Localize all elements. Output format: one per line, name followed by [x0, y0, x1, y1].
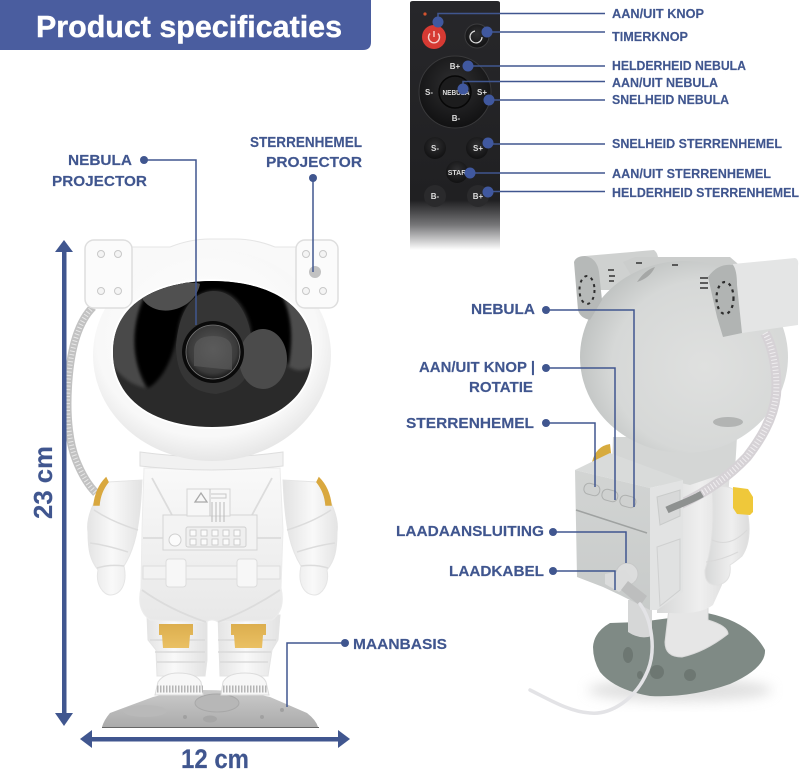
helmet ears: [85, 240, 338, 308]
charging cable: [530, 604, 652, 713]
power button: [422, 25, 446, 49]
nebula control ring: S+: [477, 88, 487, 97]
ground shadow: [588, 678, 772, 702]
star callout: [406, 416, 595, 487]
charging port and plug: [605, 563, 647, 606]
nebula callout: NEBULA: [471, 302, 536, 318]
height label: 23 cm: [28, 446, 58, 519]
star control buttons: B-: [431, 192, 440, 201]
remote callouts: HELDERHEID NEBULA: [612, 58, 747, 73]
moon base: [102, 690, 319, 728]
torso: [140, 468, 283, 622]
width arrow: [80, 730, 350, 748]
rear right ear: [708, 258, 798, 337]
charging cable callout: [449, 564, 615, 590]
title banner: Product specificaties: [36, 9, 342, 44]
legs: [147, 615, 280, 676]
rear left ear: [574, 256, 602, 320]
charging cable callout: LAADKABEL: [449, 564, 544, 580]
visor: [113, 281, 312, 427]
moon base callout: [287, 637, 447, 707]
title banner: [0, 0, 371, 50]
star control buttons: [424, 137, 489, 207]
rear legs and boot: [628, 600, 728, 657]
nebula projector callout: NEBULA: [68, 153, 133, 169]
harness: [142, 478, 281, 622]
rear arm: [705, 486, 753, 585]
top plate: [623, 257, 745, 290]
nebula control ring: B-: [452, 114, 461, 123]
power and rotation callout: ROTATIE: [469, 380, 533, 396]
headband: [130, 239, 298, 285]
moon base rear: [593, 613, 765, 696]
arms: [88, 478, 337, 595]
helmet: [93, 249, 331, 461]
back callouts: [396, 302, 634, 590]
remote callouts: SNELHEID NEBULA: [612, 92, 730, 107]
rear body: [657, 470, 730, 613]
star control buttons: S+: [473, 144, 483, 153]
silver tube: [67, 307, 96, 493]
remote callouts: TIMERKNOP: [612, 29, 688, 44]
craters: [623, 647, 696, 681]
back astronaut: [530, 250, 798, 713]
power and rotation callout: AAN/UIT KNOP |: [419, 360, 535, 376]
head vents: [608, 263, 743, 427]
height arrow: [55, 240, 73, 726]
nebula callout: [471, 302, 634, 507]
remote callouts: AAN/UIT NEBULA: [612, 75, 719, 90]
star callout: STERRENHEMEL: [406, 416, 534, 432]
mesh tube: [667, 333, 776, 510]
projector lens: [182, 321, 244, 383]
backpack: [575, 453, 702, 610]
remote control: [410, 1, 500, 250]
nebula control ring: [419, 56, 491, 128]
neck ring: [612, 437, 737, 485]
front callouts: [52, 135, 447, 707]
moon base callout: MAANBASIS: [353, 637, 447, 653]
collar: [140, 452, 283, 470]
front astronaut: [67, 239, 338, 728]
charging port callout: LAADAANSLUITING: [396, 524, 544, 540]
remote callouts: AAN/UIT KNOP: [612, 6, 704, 21]
remote callouts: AAN/UIT STERRENHEMEL: [612, 166, 771, 181]
gold knee bands: [159, 624, 266, 648]
star control buttons: B+: [473, 192, 484, 201]
nebula control ring: S-: [425, 88, 433, 97]
chest control panel: [163, 489, 257, 550]
remote callouts: SNELHEID STERRENHEMEL: [612, 136, 782, 151]
sky projector callout: [250, 135, 363, 272]
helmet rear: [580, 261, 788, 453]
sky projector callout: STERRENHEMEL: [250, 135, 362, 151]
nebula projector callout: [52, 153, 196, 325]
rear shoulder gold: [592, 444, 612, 470]
nebula control ring: B+: [450, 62, 461, 71]
boots: [155, 673, 269, 695]
remote callouts: [432, 6, 799, 200]
timer button: [465, 24, 489, 48]
power and rotation callout: [419, 360, 615, 500]
left ear box behind helmet: [585, 250, 658, 290]
star control buttons: S-: [431, 144, 439, 153]
star control buttons: STAR: [448, 170, 466, 177]
nebula projector callout: PROJECTOR: [52, 174, 148, 190]
nebula control ring: NEBULA: [442, 88, 470, 97]
charging port callout: [396, 524, 626, 563]
sky projector callout: PROJECTOR: [266, 155, 363, 171]
